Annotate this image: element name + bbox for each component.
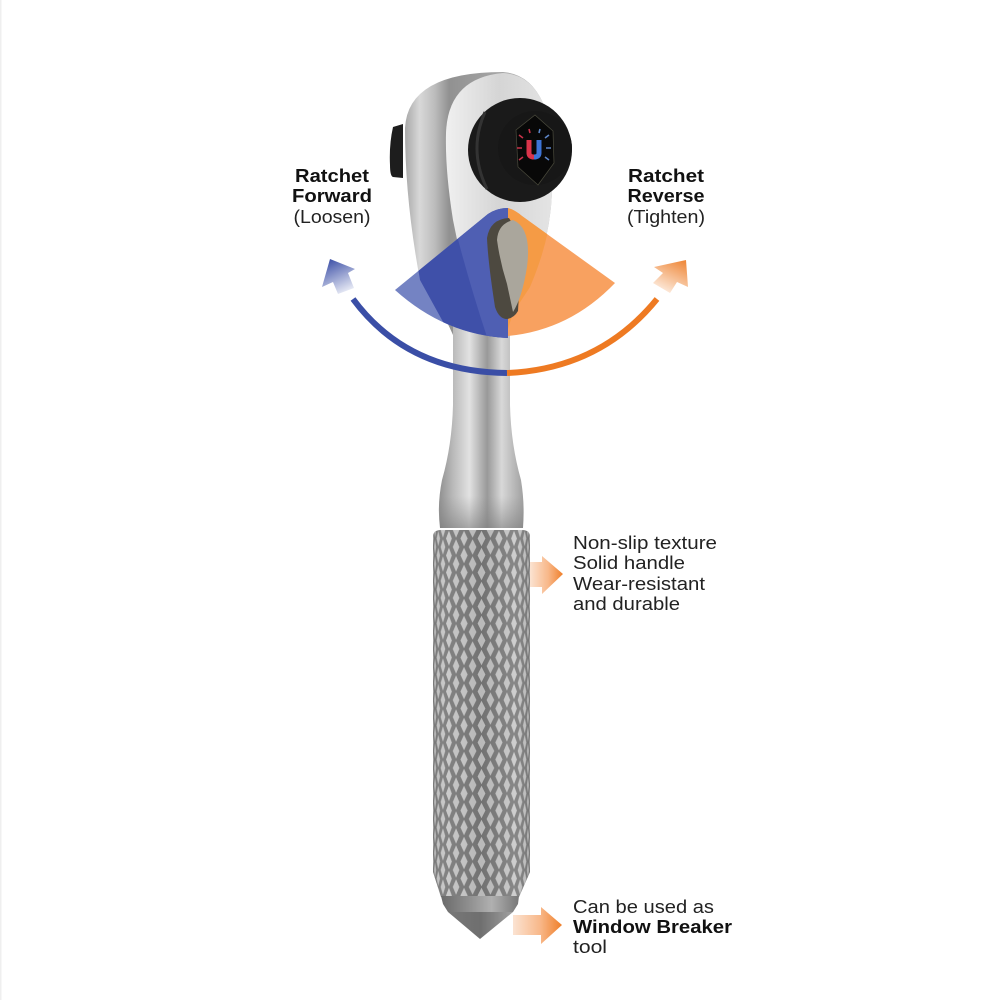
text: grip features: Solid handle	[573, 553, 685, 573]
ratchet tool	[390, 72, 552, 939]
label: ratchet forward: Ratchet	[295, 166, 369, 186]
arrow: reverse	[653, 260, 688, 293]
text: grip features: Non-slip texture	[573, 533, 717, 553]
knurled grip	[430, 528, 533, 900]
arc: reverse	[507, 299, 657, 373]
wedge: reverse direction	[508, 208, 615, 336]
text: grip features: Wear-resistant	[573, 574, 705, 594]
label: ratchet forward	[292, 166, 372, 227]
tool area under orange wedge	[508, 208, 548, 328]
socket	[468, 98, 572, 202]
window breaker tip	[448, 912, 513, 939]
page edge	[0, 0, 2, 1000]
text: grip features	[573, 533, 717, 614]
icon: magnet	[529, 140, 539, 157]
wedge: forward direction	[395, 208, 508, 338]
direction lever	[487, 218, 528, 319]
label: ratchet reverse: (Tighten)	[627, 207, 705, 227]
icon: hexagon socket opening	[516, 115, 554, 185]
text: window breaker: Window Breaker	[573, 917, 732, 937]
icon: magnet field lines	[517, 129, 551, 160]
label: ratchet reverse	[627, 166, 705, 227]
head front face	[446, 73, 552, 325]
label: ratchet forward: (Loosen)	[294, 207, 370, 227]
label: ratchet reverse: Reverse	[628, 186, 704, 206]
text: window breaker	[573, 897, 732, 957]
shaft and neck	[439, 325, 524, 528]
arc: forward	[353, 299, 507, 373]
label: ratchet reverse: Ratchet	[628, 166, 704, 186]
text: window breaker: tool	[573, 937, 607, 957]
text: window breaker: Can be used as	[573, 897, 714, 917]
arrow: forward	[322, 259, 355, 294]
grip end ring	[441, 896, 519, 912]
icon: direction switch knob	[390, 124, 403, 178]
ratchet head	[405, 72, 552, 335]
text: grip features: and durable	[573, 594, 680, 614]
arrow: window breaker callout	[513, 907, 562, 944]
arrow: grip callout	[530, 556, 563, 594]
label: ratchet forward: Forward	[292, 186, 372, 206]
collar below grip	[440, 496, 523, 528]
tool area under blue wedge	[418, 208, 507, 338]
